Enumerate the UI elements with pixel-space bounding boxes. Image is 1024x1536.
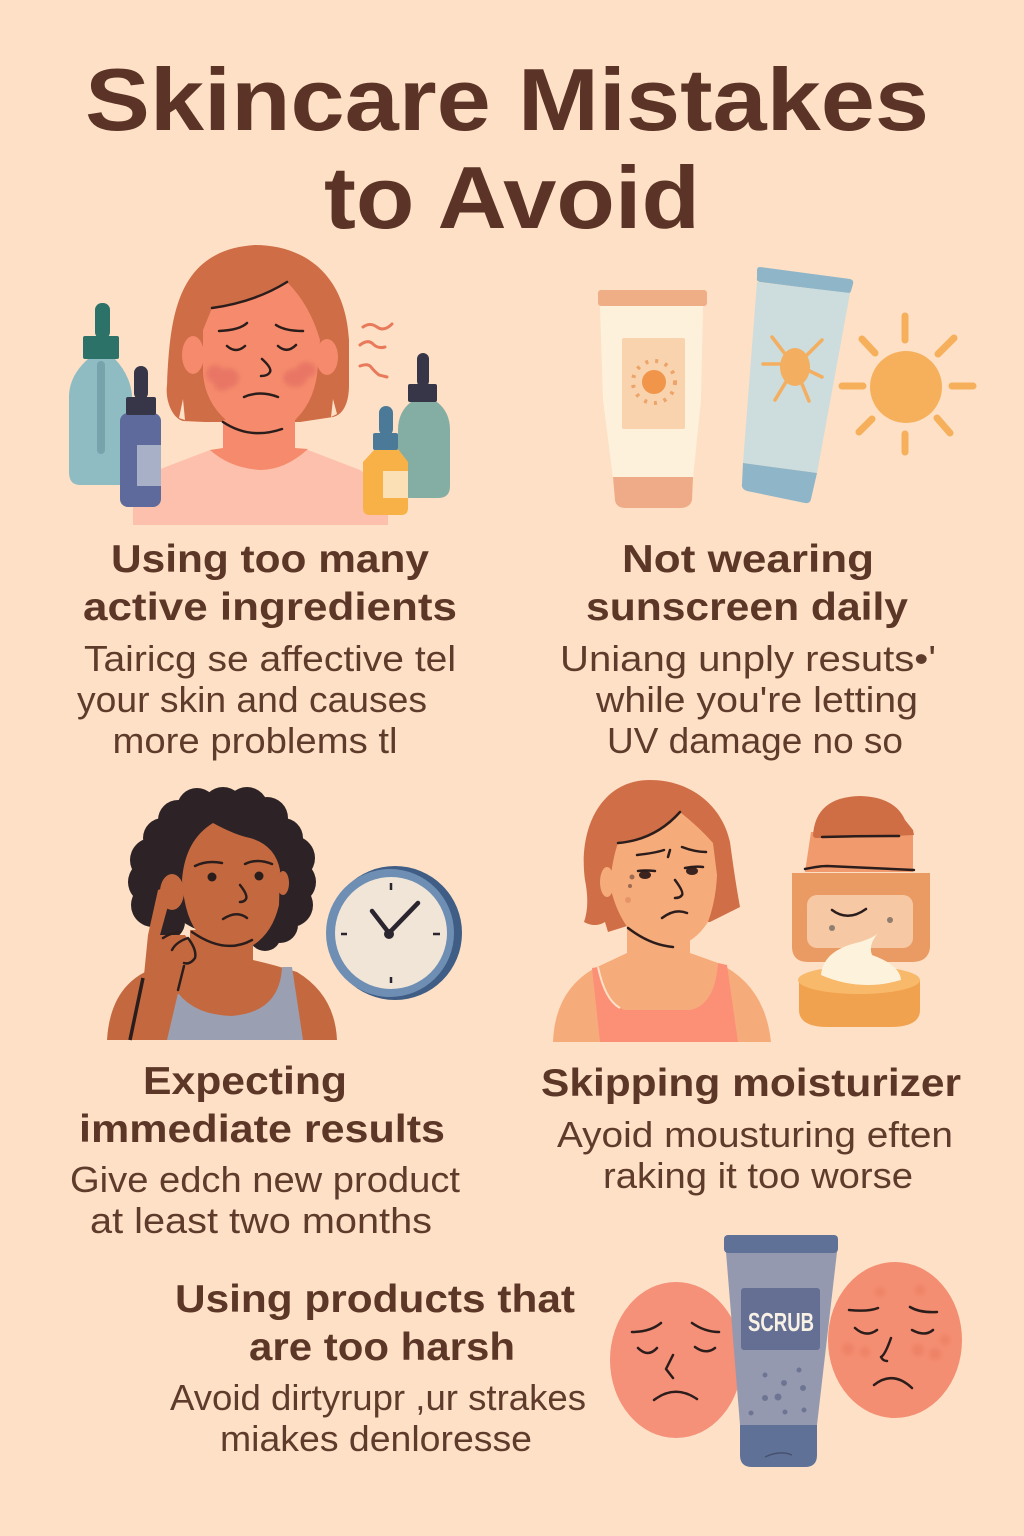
icon: sage dropper bottle (398, 353, 450, 498)
heading: using products that are too harsh (175, 1278, 575, 1369)
heading: skipping moisturizer: Skipping moisturizer (541, 1062, 961, 1105)
icon: amber dropper bottle (363, 406, 408, 515)
text block: moisturizer description (557, 1114, 953, 1196)
illustration: scrub tube between irritated faces (610, 1235, 962, 1467)
heading: using too many active ingredients (83, 538, 457, 629)
icon: wall clock (326, 866, 462, 1000)
icon: cream tube (598, 290, 707, 508)
illustration: woman with irritated skin and serums (69, 245, 450, 525)
heading: not wearing sunscreen daily: sunscreen daily (586, 586, 908, 629)
icon: teal dropper bottle (69, 303, 132, 485)
heading: using products that are too harsh: Using products that (175, 1278, 575, 1321)
text block: ingredients description (77, 638, 456, 761)
heading: expecting immediate results (79, 1060, 445, 1151)
illustration: sunscreen tubes and sun (598, 267, 973, 508)
text block: sunscreen description: Uniang unply resuts•' (560, 638, 936, 679)
illustration: woman checking her skin with a clock (107, 787, 462, 1040)
text block: sunscreen description (560, 638, 936, 761)
heading: expecting immediate results: immediate results (79, 1108, 445, 1151)
text block: harsh products description: Avoid dirtyrupr ,ur strakes (170, 1377, 586, 1418)
heading: using too many active ingredients: active ingredients (83, 586, 457, 629)
text block: ingredients description: your skin and causes (77, 679, 427, 720)
text block: moisturizer description: raking it too worse (603, 1155, 913, 1196)
text block: results description: Give edch new product (70, 1159, 460, 1200)
icon: scrub tube (724, 1235, 838, 1467)
text block: sunscreen description: while you're letting (595, 679, 918, 720)
heading: not wearing sunscreen daily: Not wearing (622, 538, 874, 581)
text block: sunscreen description: UV damage no so (607, 720, 903, 761)
icon: blue tube (742, 267, 853, 503)
text block: moisturizer description: Ayoid mousturing eften (557, 1114, 953, 1155)
icon: navy dropper bottle (120, 366, 161, 507)
title: Skincare Mistakes (85, 50, 929, 149)
heading: not wearing sunscreen daily (586, 538, 908, 629)
title (85, 50, 929, 247)
heading: expecting immediate results: Expecting (143, 1060, 347, 1103)
icon: scrub tube: SCRUB (748, 1307, 814, 1337)
heading: using products that are too harsh: are too harsh (249, 1326, 515, 1369)
illustration: woman with dry skin and moisturizer jars (553, 780, 930, 1042)
icon: sad face right (828, 1262, 962, 1418)
heading: using too many active ingredients: Using too many (111, 538, 429, 581)
title: to Avoid (324, 148, 700, 247)
text block: ingredients description: Tairicg se affective tel (84, 638, 456, 679)
text block: ingredients description: more problems tl (112, 720, 398, 761)
text block: results description (70, 1159, 460, 1241)
text block: harsh products description: miakes denloresse (220, 1418, 532, 1459)
icon: sad face left (610, 1282, 742, 1438)
icon: sun (842, 316, 973, 452)
icon: moisturizer jar (792, 796, 930, 1027)
text block: harsh products description (170, 1377, 586, 1459)
text block: results description: at least two months (90, 1200, 432, 1241)
